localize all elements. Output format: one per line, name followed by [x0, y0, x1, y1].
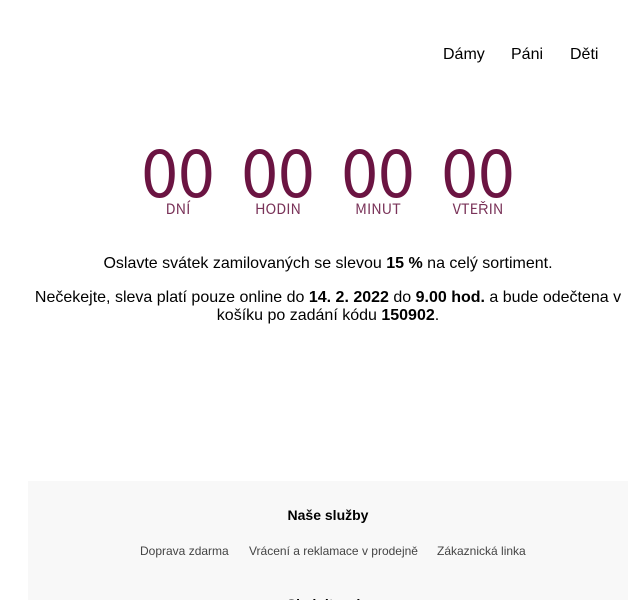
countdown timer — [141, 121, 515, 219]
promo text: conditions: Nečekejte, sleva platí pouze online do 14. 2. 2022 do 9.00 hod. a bude odečtena v košíku po zadání kódu 150902. — [35, 289, 621, 324]
countdown: seconds: VTEŘIN — [453, 198, 503, 219]
countdown: days: DNÍ — [166, 198, 190, 219]
promo text: discount: Oslavte svátek zamilovaných se slevou 15 % na celý sortiment. — [103, 255, 553, 272]
countdown: minutes: MINUT — [355, 198, 401, 219]
link: Vrácení a reklamace v prodejně: Vrácení a reklamace v prodejně — [249, 544, 418, 558]
menu item: Páni: Páni — [511, 46, 543, 63]
footer heading: Naše služby: Naše služby — [288, 507, 368, 523]
footer panel — [28, 481, 628, 600]
link: Zákaznická linka: Zákaznická linka — [437, 544, 526, 558]
countdown: seconds: 00 — [441, 121, 515, 217]
footer links — [140, 544, 526, 558]
countdown: minutes: 00 — [341, 121, 415, 217]
menu item: Dámy: Dámy — [443, 46, 485, 63]
countdown: hours: 00 — [241, 121, 315, 217]
menu item: Děti: Děti — [570, 46, 598, 63]
countdown: hours: HODIN — [255, 198, 301, 219]
countdown: days: 00 — [141, 121, 215, 217]
navigation menu — [443, 46, 598, 63]
link: Doprava zdarma: Doprava zdarma — [140, 544, 229, 558]
